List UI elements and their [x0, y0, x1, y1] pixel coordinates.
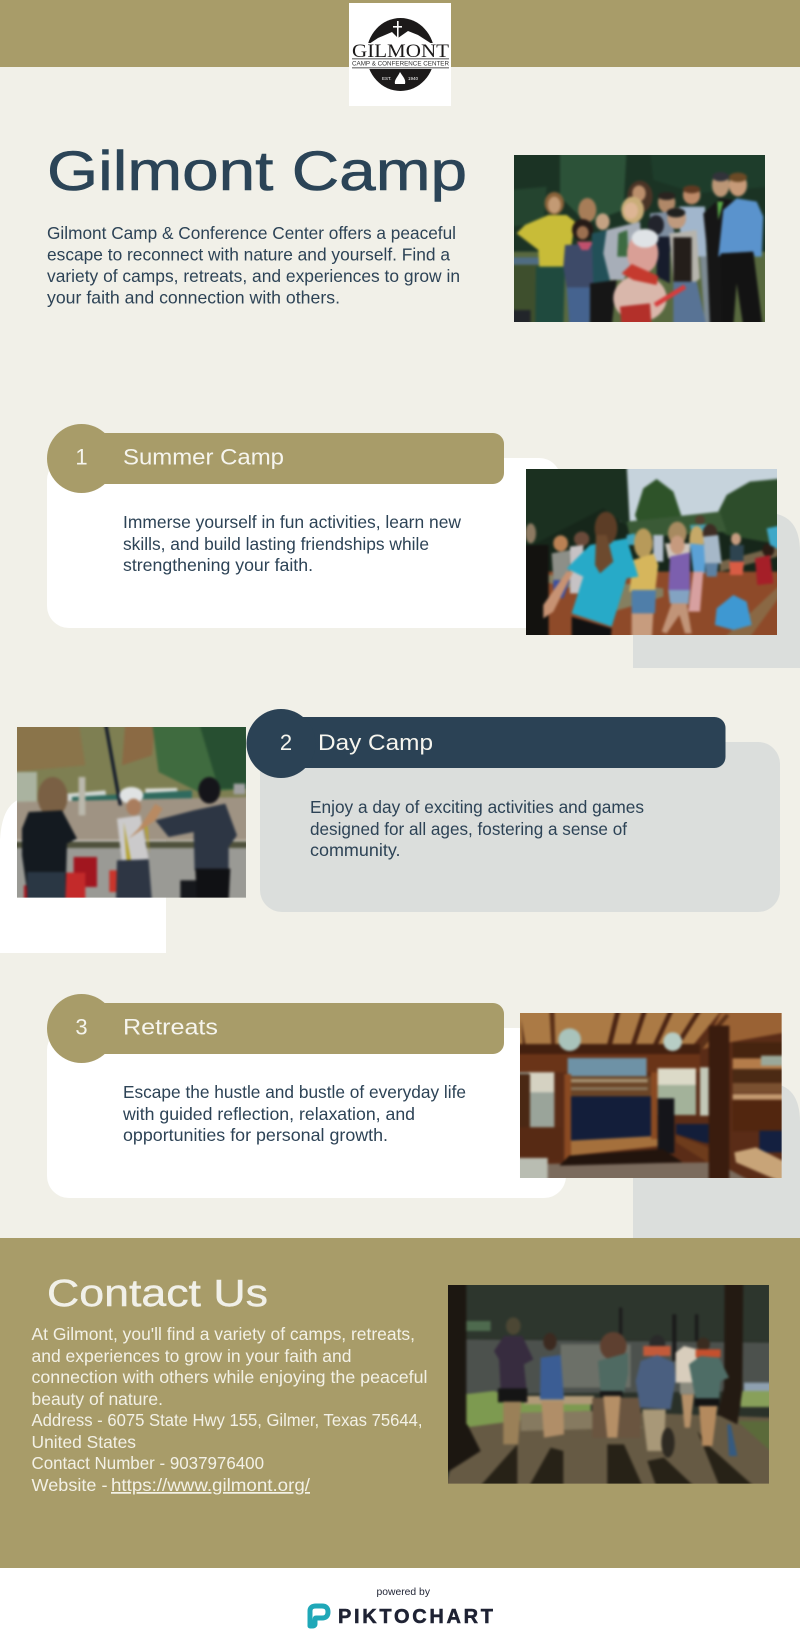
- logo: Gilmont Camp & Conference Center: [349, 3, 451, 106]
- panel: Day Camp: [246, 709, 780, 912]
- description: skills, and build lasting friendships while: [123, 534, 429, 554]
- photo: campers group with mascot: [510, 150, 770, 328]
- heading: Contact Us: Contact Us: [47, 1273, 268, 1315]
- panel: Retreats: [47, 994, 566, 1198]
- contact details: Contact Number - 9037976400: [32, 1453, 264, 1473]
- number badge and title bar: Day Camp: [318, 730, 433, 755]
- description: community.: [310, 840, 400, 860]
- contact details: connection with others while enjoying the peaceful: [32, 1367, 428, 1387]
- card: [47, 1028, 566, 1198]
- header band: [0, 0, 800, 67]
- photo: cabin interior with bunk beds: [516, 1009, 786, 1184]
- description: Escape the hustle and bustle of everyday life: [123, 1082, 466, 1102]
- intro text: your faith and connection with others.: [47, 288, 340, 308]
- contact details: https://www.gilmont.org/: [111, 1475, 310, 1495]
- description: Immerse yourself in fun activities, learn new: [123, 512, 461, 532]
- footer band: contact: [0, 1238, 800, 1568]
- shape: grey backdrop behind Summer Camp photo: [633, 513, 800, 668]
- logo: Gilmont Camp & Conference Center: CAMP & CONFERENCE CENTER: [352, 62, 450, 68]
- description: [123, 512, 461, 575]
- intro text: Gilmont Camp & Conference Center offers a peaceful: [47, 223, 456, 243]
- number badge and title bar: [47, 424, 504, 493]
- title: Gilmont Camp: [47, 139, 467, 202]
- contact details: Website -: [32, 1475, 108, 1495]
- intro text: [47, 223, 460, 308]
- number badge and title bar: [246, 709, 726, 778]
- photo: high five at ropes course: [12, 722, 252, 903]
- number badge and title bar: 3: [75, 1014, 88, 1040]
- logo: Piktochart: PIKTOCHART: [338, 1606, 493, 1628]
- logo: Gilmont Camp & Conference Center: EST.: [382, 76, 392, 81]
- contact details: beauty of nature.: [32, 1389, 163, 1409]
- shape: grey backdrop behind Retreats photo: [633, 1083, 800, 1238]
- footer: powered by: [0, 1568, 800, 1648]
- description: [310, 797, 644, 860]
- photo: summer camp kids dancing: [526, 469, 777, 635]
- panel: Summer Camp: [47, 424, 561, 628]
- label: powered by: powered by: [376, 1586, 431, 1598]
- intro text: variety of camps, retreats, and experiences to grow in: [47, 266, 460, 286]
- logo: Gilmont Camp & Conference Center: 1940: [408, 76, 419, 81]
- description: [122, 1082, 466, 1145]
- number badge and title bar: 2: [280, 730, 292, 755]
- contact details: At Gilmont, you'll find a variety of camps, retreats,: [32, 1324, 415, 1344]
- logo: Gilmont Camp & Conference Center: GILMONT: [352, 41, 449, 62]
- contact details: and experiences to grow in your faith and: [32, 1346, 352, 1366]
- card: [260, 742, 780, 912]
- intro text: escape to reconnect with nature and yourself. Find a: [47, 244, 450, 264]
- description: with guided reflection, relaxation, and: [122, 1104, 415, 1124]
- shape: white backdrop behind Day Camp photo: [0, 798, 166, 953]
- description: opportunities for personal growth.: [123, 1125, 388, 1145]
- number badge and title bar: Retreats: [123, 1014, 218, 1040]
- description: strengthening your faith.: [123, 555, 313, 575]
- description: Enjoy a day of exciting activities and games: [310, 797, 644, 817]
- description: designed for all ages, fostering a sense of: [310, 819, 627, 839]
- photo: campers walking to the lake: [444, 1281, 774, 1489]
- number badge and title bar: [47, 994, 504, 1063]
- contact details: United States: [32, 1432, 136, 1452]
- contact details: Address - 6075 State Hwy 155, Gilmer, Texas 75644,: [32, 1410, 422, 1430]
- contact details: [32, 1324, 428, 1495]
- number badge and title bar: 1: [75, 444, 88, 470]
- card: [47, 458, 561, 628]
- number badge and title bar: Summer Camp: [123, 444, 284, 470]
